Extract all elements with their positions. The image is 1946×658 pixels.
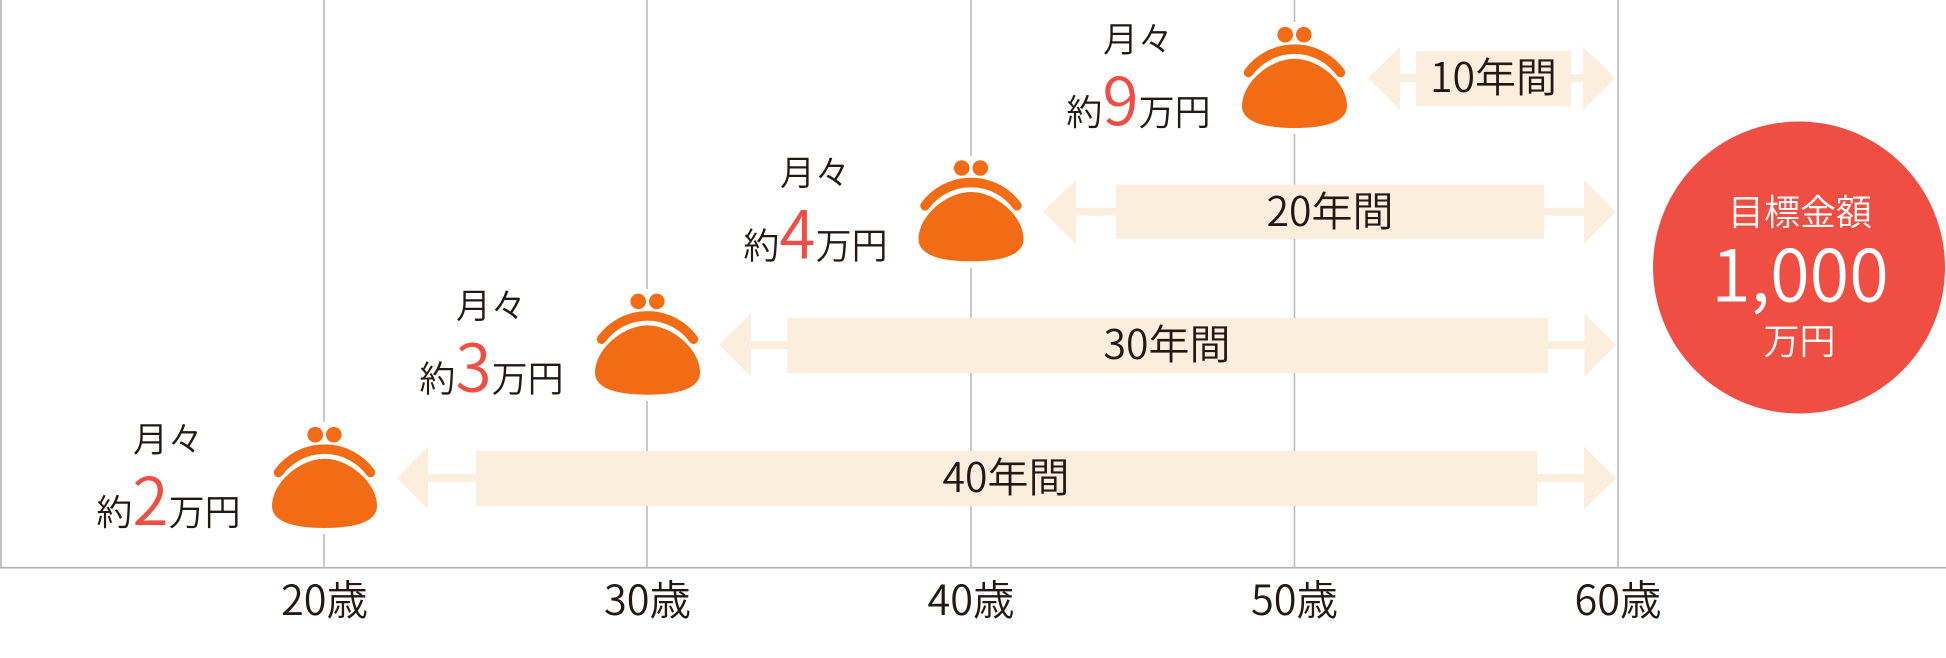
age labels (281, 567, 1662, 627)
icon: coin purse, age 20 (272, 427, 377, 528)
monthly amount: 約4万円: 約4万円 (743, 182, 888, 278)
label: 20年間: 20年間 (1266, 178, 1394, 238)
arrow: 40年間 (397, 444, 1616, 510)
callout: target amount: 1,000 (1711, 218, 1889, 322)
age labels: 30歳 (604, 567, 691, 627)
age labels: 60歳 (1574, 567, 1662, 627)
age labels: 50歳 (1251, 567, 1338, 627)
monthly amount: 約3万円: 約3万円 (419, 316, 564, 412)
monthly amount: 約9万円: 月々 (1103, 12, 1173, 63)
age labels: 40歳 (927, 567, 1015, 627)
label: 40年間: 40年間 (942, 444, 1070, 504)
label: 30年間: 30年間 (1103, 311, 1231, 371)
age labels: 20歳 (281, 567, 368, 627)
label: 10年間: 10年間 (1430, 44, 1557, 104)
monthly amount: 約2万円: 月々 (133, 412, 203, 463)
monthly amount: 約9万円: 約9万円 (1066, 49, 1211, 145)
callout: target amount: 目標金額 (1728, 184, 1872, 236)
icon: coin purse, age 50 (1242, 27, 1347, 128)
arrow: 10年間 (1368, 44, 1615, 110)
monthly amount: 約2万円: 約2万円 (96, 449, 241, 545)
callout: target amount: 万円 (1763, 313, 1836, 365)
icon: coin purse, age 40 (918, 160, 1024, 261)
arrow: 20年間 (1043, 178, 1616, 244)
monthly amount: 約3万円: 月々 (456, 279, 526, 330)
icon: coin purse, age 30 (595, 294, 700, 395)
callout: target amount (1653, 122, 1945, 414)
monthly amount: 約4万円: 月々 (780, 145, 850, 196)
arrow: 30年間 (719, 311, 1616, 376)
